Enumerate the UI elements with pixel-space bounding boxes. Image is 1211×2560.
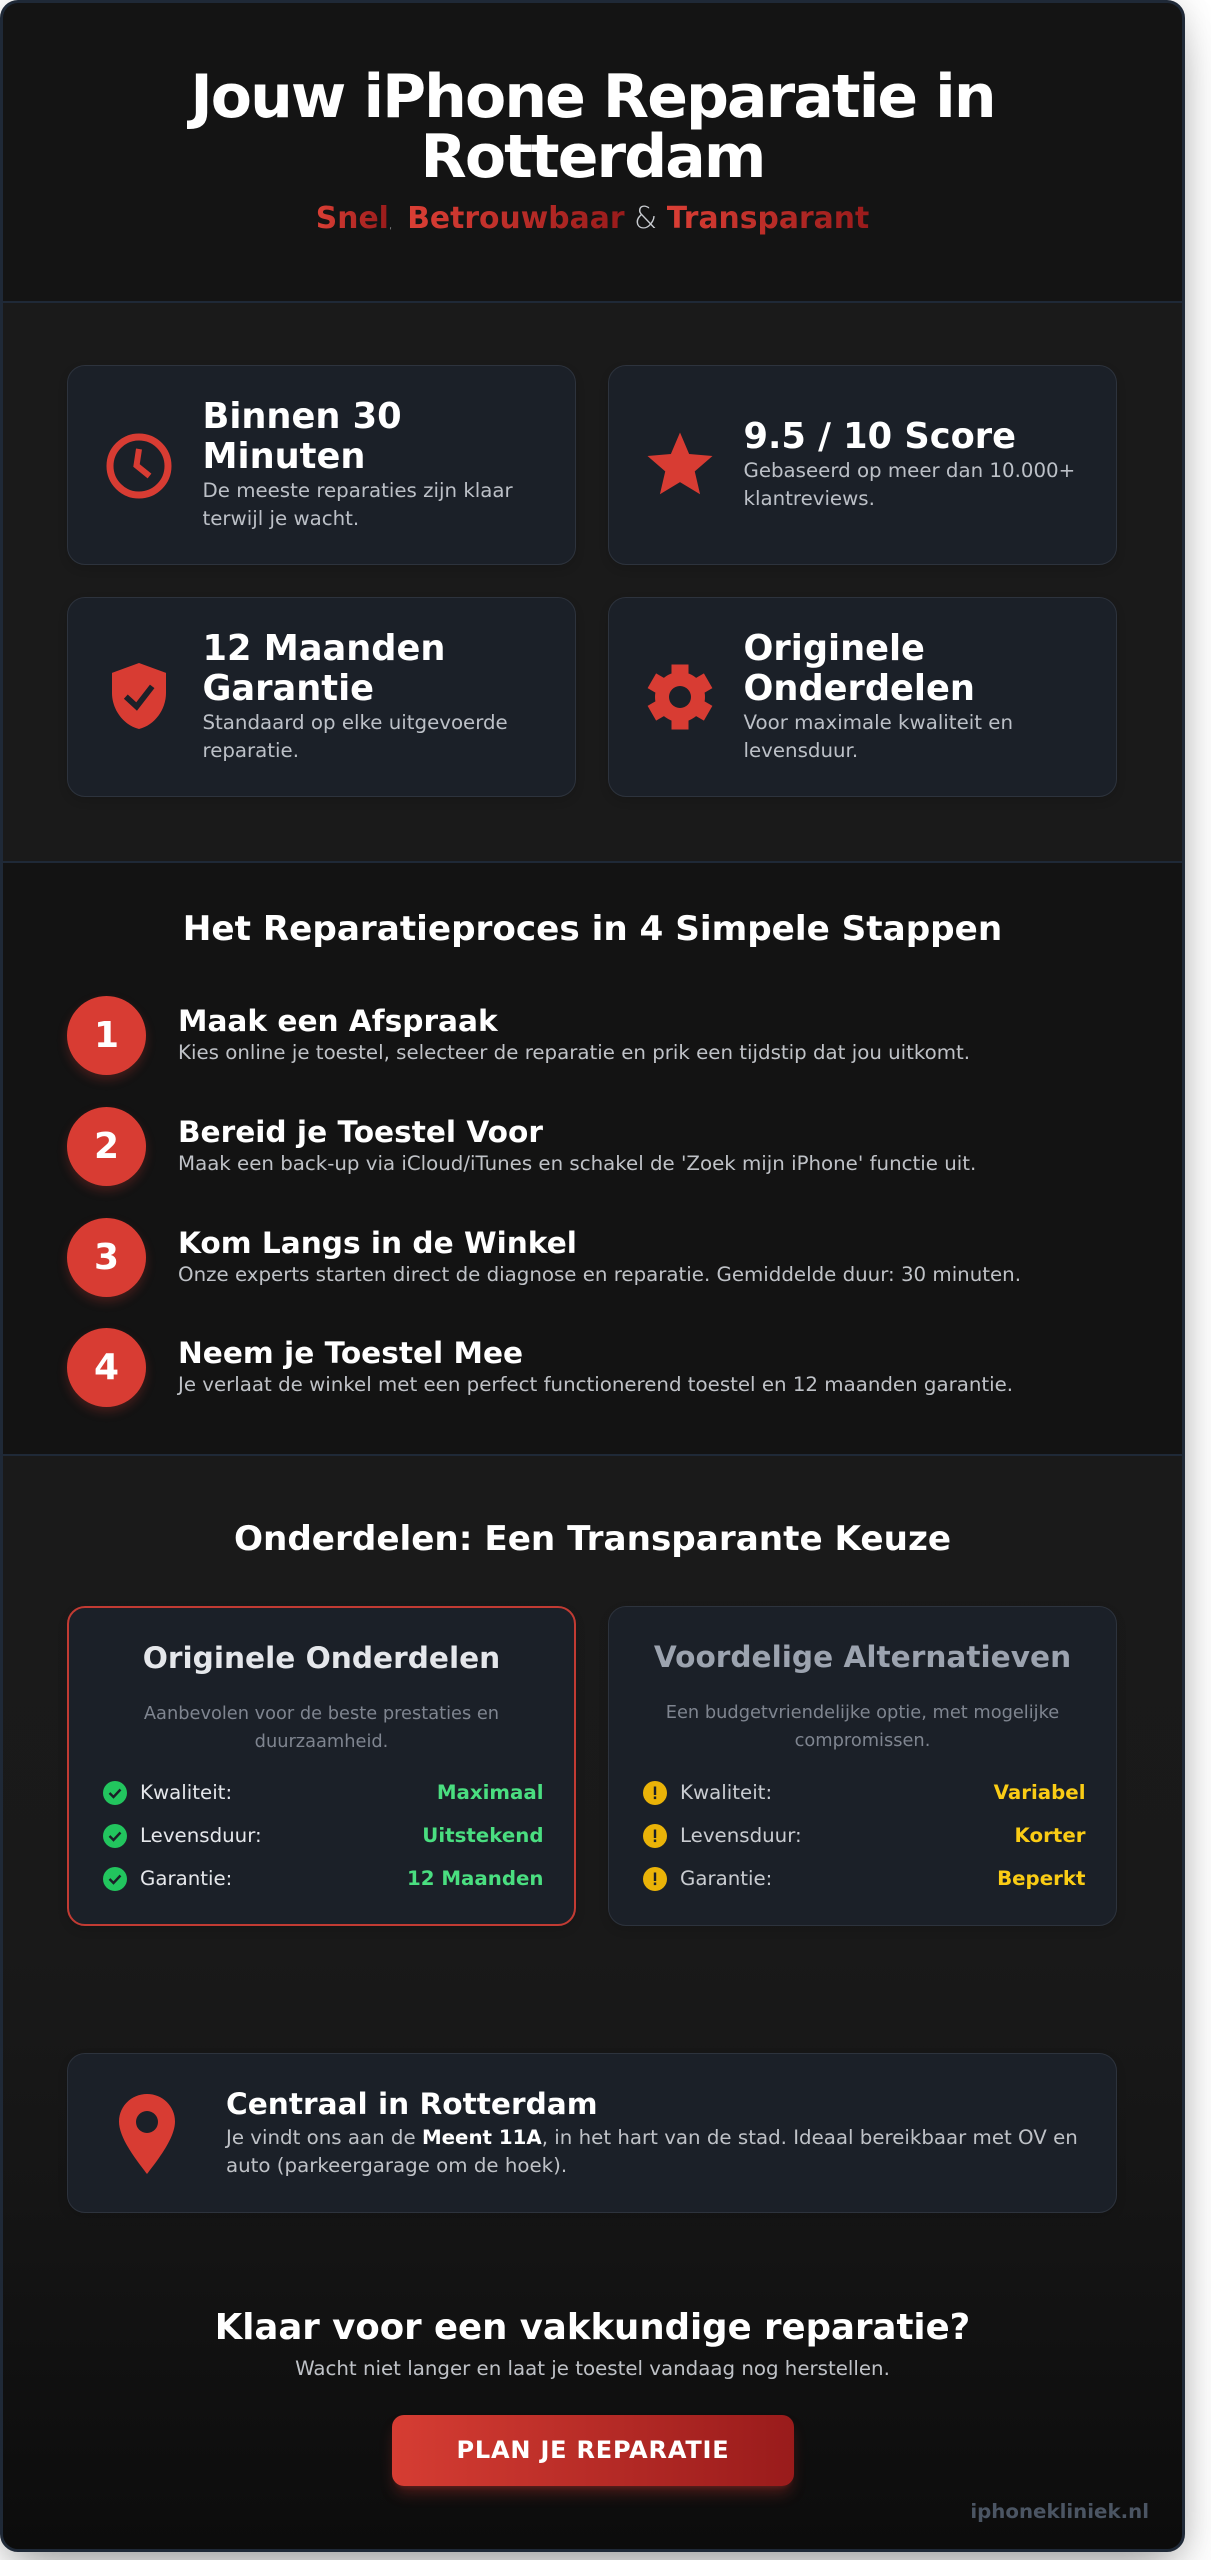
step number 2: 2 — [94, 1126, 119, 1167]
icon: check — [103, 1867, 127, 1891]
title — [187, 62, 995, 192]
text: parts — [744, 628, 1013, 762]
label: Levensduur: — [680, 1824, 802, 1846]
panel: feature warranty — [67, 597, 576, 797]
step title 2: Bereid je Toestel Voor — [178, 1115, 543, 1149]
step title 4: Neem je Toestel Mee — [178, 1336, 523, 1370]
alternatives title: Voordelige Alternatieven — [654, 1640, 1071, 1674]
step number 1 — [67, 996, 146, 1075]
location text — [224, 2126, 1078, 2177]
text: parts: Onderdelen — [744, 668, 975, 709]
step 3 — [63, 1218, 1021, 1306]
row: warranty — [643, 1867, 1086, 1891]
heading: process: Het Reparatieproces in 4 Simpele Stappen — [183, 908, 1002, 948]
icon: check — [103, 1781, 127, 1805]
step 2 — [63, 1107, 976, 1195]
alternatives description: compromissen. — [795, 1730, 930, 1751]
step number 3 — [67, 1218, 146, 1297]
icon: warning — [643, 1824, 667, 1848]
location title: Centraal in Rotterdam — [226, 2087, 598, 2121]
step number 4 — [67, 1328, 146, 1407]
step title 1: Maak een Afspraak — [178, 1004, 498, 1038]
text: score: Gebaseerd op meer dan 10.000+ — [744, 459, 1075, 482]
icon: warning — [643, 1867, 667, 1891]
value: Uitstekend — [422, 1824, 544, 1846]
step number 2 — [67, 1107, 146, 1186]
label: Kwaliteit: — [680, 1780, 772, 1804]
panel: location — [67, 2053, 1117, 2213]
background: parts, location and call to action sections — [3, 1454, 1182, 2554]
original description: duurzaamheid. — [255, 1731, 388, 1752]
row: quality — [103, 1780, 544, 1805]
call to action button — [392, 2415, 794, 2486]
text: warranty: 12 Maanden — [202, 628, 445, 669]
step number 4: 4 — [94, 1347, 119, 1388]
subtitle: Snel, Betrouwbaar & Transparant — [316, 201, 869, 236]
step 1 — [63, 996, 970, 1084]
original description — [144, 1703, 499, 1752]
step text 4: Je verlaat de winkel met een perfect functionerend toestel en 12 maanden garantie. — [178, 1373, 1013, 1396]
icon: star — [648, 432, 712, 494]
row: warranty — [103, 1867, 544, 1891]
panel: original parts — [67, 1606, 576, 1926]
step text 3: Onze experts starten direct de diagnose en reparatie. Gemiddelde duur: 30 minuten. — [178, 1263, 1021, 1286]
text: warranty: Garantie — [202, 668, 374, 709]
value: Beperkt — [997, 1867, 1086, 1890]
step title 3: Kom Langs in de Winkel — [178, 1226, 577, 1260]
value: Korter — [1015, 1824, 1086, 1846]
panel: feature score — [608, 365, 1117, 565]
icon: clock — [106, 434, 172, 498]
location text: Je vindt ons aan de Meent 11A, in het hart van de stad. Ideaal bereikbaar met OV en — [226, 2126, 1078, 2149]
original title: Originele Onderdelen — [143, 1641, 500, 1675]
header — [187, 62, 995, 236]
row: lifespan — [103, 1824, 544, 1848]
alternatives description — [666, 1702, 1059, 1751]
step text 2: Maak een back-up via iCloud/iTunes en schakel de 'Zoek mijn iPhone' functie uit. — [178, 1152, 976, 1175]
text: time: Minuten — [202, 436, 365, 477]
text: score: 9.5 / 10 Score — [744, 416, 1016, 457]
step 4 — [63, 1328, 1013, 1416]
call to action button: PLAN JE REPARATIE — [457, 2436, 729, 2464]
text: parts: Originele — [744, 628, 925, 669]
heading: parts: Onderdelen: Een Transparante Keuze — [234, 1519, 951, 1559]
icon: check — [103, 1824, 127, 1848]
text: score — [744, 416, 1075, 510]
row: lifespan — [643, 1824, 1086, 1848]
text: warranty — [202, 628, 508, 762]
value: Maximaal — [437, 1780, 544, 1804]
panel: budget alternatives — [608, 1606, 1117, 1926]
text: time: De meeste reparaties zijn klaar — [202, 479, 513, 502]
call to action heading: Klaar voor een vakkundige reparatie? — [215, 2307, 970, 2348]
label: Garantie: — [140, 1867, 232, 1890]
step number 3: 3 — [94, 1237, 119, 1278]
text: warranty: reparatie. — [202, 739, 299, 762]
text: time: terwijl je wacht. — [202, 507, 359, 530]
text: time — [202, 396, 513, 530]
value: 12 Maanden — [407, 1867, 544, 1890]
icon: warning — [643, 1781, 667, 1805]
text: time: Binnen 30 — [202, 396, 402, 437]
step number 1: 1 — [94, 1015, 119, 1056]
background: features section — [3, 301, 1182, 861]
label: Levensduur: — [140, 1824, 262, 1846]
background: process section — [3, 861, 1182, 1454]
alternatives description: Een budgetvriendelijke optie, met mogelijke — [666, 1702, 1059, 1723]
panel: feature time — [67, 365, 576, 565]
row: quality — [643, 1780, 1086, 1805]
step text 1: Kies online je toestel, selecteer de reparatie en prik een tijdstip dat jou uitkomt. — [178, 1041, 970, 1064]
value: Variabel — [994, 1780, 1086, 1804]
text: parts: levensduur. — [744, 739, 858, 762]
brand: iphonekliniek.nl — [970, 2500, 1149, 2523]
title: Jouw iPhone Reparatie in — [190, 62, 995, 132]
call to action text: Wacht niet langer en laat je toestel vandaag nog herstellen. — [295, 2357, 890, 2380]
text: score: klantreviews. — [744, 487, 875, 510]
icon: map pin — [119, 2094, 175, 2174]
icon: shield — [112, 663, 166, 729]
panel: feature parts — [608, 597, 1117, 797]
icon: gear — [648, 664, 712, 730]
location text: auto (parkeergarage om de hoek). — [226, 2154, 567, 2177]
label: Kwaliteit: — [140, 1780, 232, 1804]
original description: Aanbevolen voor de beste prestaties en — [144, 1703, 499, 1724]
label: Garantie: — [680, 1867, 772, 1890]
text: parts: Voor maximale kwaliteit en — [744, 711, 1013, 734]
title: Rotterdam — [421, 122, 764, 192]
text: warranty: Standaard op elke uitgevoerde — [202, 711, 508, 734]
